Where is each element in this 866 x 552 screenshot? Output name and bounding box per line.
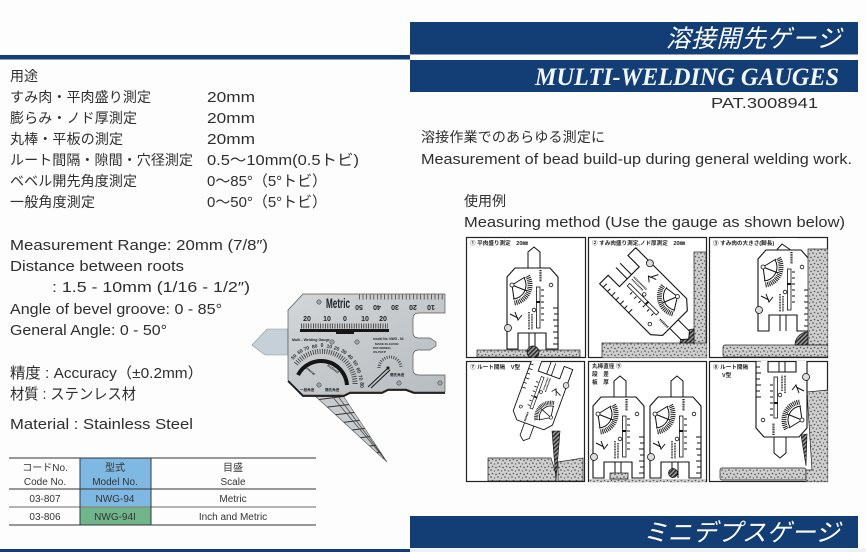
spec table: Model No. [92, 477, 138, 488]
gauge model lettering: 開先角度 [325, 387, 340, 392]
diagram 3: fillet leg size [710, 229, 828, 358]
text block: specifications in English: Angle of bevel groove: 0 - 85° [10, 301, 222, 318]
gauge model lettering: 開先角度 [390, 372, 405, 377]
diagram 4: root gap V: ⑦ ルート間隔 V型 [470, 363, 520, 371]
gauge model lettering: 20 [379, 316, 387, 323]
patent number: PAT.3008941 [711, 95, 818, 112]
gauge model lettering: US.PAT.P [373, 350, 386, 354]
gauge angle arc: 0 [321, 343, 324, 349]
spec table: 03-807 [29, 494, 61, 505]
diagram 2: fillet and throat [588, 238, 710, 358]
text block: accuracy and material: 材質 : ステンレス材 [10, 385, 136, 403]
spec table: コードNo. [22, 463, 68, 474]
gauge angle arc [290, 343, 364, 388]
header bar: English title [410, 60, 858, 92]
text block: specifications in Japanese [10, 68, 359, 211]
gauge body [288, 294, 445, 395]
text block: specifications in Japanese: 20mm [207, 131, 255, 148]
text block: specifications in Japanese: 丸棒・平板の測定 [10, 131, 123, 147]
diagram 5: round bar and plate: 段 差 [592, 370, 609, 378]
gauge model lettering [292, 295, 435, 392]
header bar: English title: MULTI-WELDING GAUGES [534, 64, 839, 91]
text block: specifications in English: General Angle: 0 - 50° [10, 322, 167, 339]
diagram 2: fillet and throat: ② すみ肉盛り測定,ノド厚測定 20㎜ [592, 239, 686, 247]
diagram 5: round bar and plate [588, 362, 706, 482]
gauge model lettering: 20 [409, 303, 417, 310]
gauge model lettering: 10 [323, 316, 331, 323]
text block: specifications in English: : 1.5 - 10mm (1/16 - 1/2″) [52, 279, 250, 296]
gauge top ruler [359, 294, 445, 300]
spec table: Inch and Metric [199, 512, 267, 523]
text block: specifications in English: Distance between roots [10, 258, 184, 275]
gauge small protractor [368, 357, 401, 388]
bottom right pale strip [410, 548, 866, 552]
header bar: Japanese title [410, 22, 858, 54]
gauge model lettering: Inclined [326, 364, 340, 374]
diagram 5: round bar and plate: 板 厚 [592, 378, 609, 386]
gauge sliding scale [300, 326, 389, 334]
text block: specifications in Japanese: 0～50°（5°トビ） [207, 194, 327, 211]
diagram 1: flat bead: ① 平肉盛り測定 20㎜ [470, 239, 529, 247]
gauge angle arc: 60 [296, 348, 305, 356]
text block: accuracy and material [10, 365, 203, 433]
top left rule [0, 55, 410, 60]
gauge angle arc: 50 [290, 353, 299, 361]
text block: accuracy and material: 精度 : Accuracy（±0.2mm） [10, 365, 203, 382]
text block: specifications in English [10, 237, 268, 339]
spec table: NWG-94I [94, 512, 136, 523]
gauge angle arc: 80 [312, 344, 318, 350]
diagram 4: root gap V [466, 355, 584, 482]
spec table [9, 458, 316, 525]
gauge rivets [317, 300, 442, 387]
gauge angle arc: 40 [346, 353, 354, 362]
gauge model lettering: model No. NWG - 94 [373, 337, 404, 341]
gauge wedge scale [313, 394, 387, 462]
bottom left rule [0, 549, 410, 552]
product photo: multi-welding gauge [252, 294, 445, 462]
text block: specifications in Japanese: 20mm [207, 89, 255, 106]
spec table: Code No. [24, 477, 66, 488]
text block: specifications in Japanese: すみ肉・平肉盛り測定 [10, 89, 151, 105]
gauge angle arc: 50 [351, 359, 359, 368]
table colored column [80, 458, 151, 507]
diagram 6: root gap V on wall: ⑧ ルート間隔 [713, 363, 749, 371]
gauge model lettering: Metric [326, 295, 350, 311]
gauge model lettering: 40 [373, 303, 381, 310]
text block: accuracy and material: Material : Stainless Steel [10, 416, 193, 433]
gauge angle arc: 20 [333, 345, 340, 353]
header bar: Japanese title: 溶接開先ゲージ [666, 26, 844, 53]
text block: specifications in Japanese: ルート間隔・隙間・穴径測定 [10, 152, 193, 168]
diagram 1: flat bead [466, 238, 586, 358]
usage heading: 使用例 [464, 193, 506, 209]
gauge angle arc: 70 [357, 375, 363, 381]
diagram 5: round bar and plate: 丸棒直径 ⑨ [592, 362, 622, 370]
text block: specifications in Japanese: 一般角度測定 [10, 194, 95, 210]
gauge model lettering: MADE IN JAPAN [375, 342, 398, 346]
gauge model lettering: 10 [361, 316, 369, 323]
gauge pointer [252, 329, 288, 355]
diagram 3: fillet leg size: ③ すみ肉の大きさ(脚長) [713, 239, 774, 247]
gauge angle arc: 30 [340, 348, 348, 356]
spec table: Metric [219, 494, 247, 505]
text block: specifications in Japanese: 膨らみ・ノド厚測定 [10, 110, 137, 126]
text block: specifications in English: Measurement Range: 20mm (7/8″) [10, 237, 268, 254]
text block: specifications in Japanese: 0.5～10mm(0.5トビ) [207, 152, 359, 169]
gauge model lettering: 20 [303, 316, 311, 323]
gauge model lettering: 50 [355, 303, 363, 310]
spec table: 型式 [105, 461, 125, 474]
gauge angle arc: 70 [303, 345, 311, 353]
spec table: 03-806 [29, 512, 61, 523]
header bar: mini depth gauge: ミニデプスゲージ [643, 520, 844, 547]
gauge model lettering: 10 [427, 303, 435, 310]
gauge angle arc: 80 [358, 382, 364, 388]
spec table: NWG-94 [96, 494, 135, 505]
text block: specifications in Japanese: 20mm [207, 110, 255, 127]
usage heading: Measuring method (Use the gauge as shown below) [464, 214, 845, 231]
gauge model lettering: PAT.3008941 [373, 346, 391, 350]
gauge model lettering: 一般角度 [300, 387, 315, 392]
diagram 6: root gap V on wall: V型 [722, 371, 732, 379]
diagram 6: root gap V on wall [710, 356, 828, 482]
spec table: 目盛 [223, 461, 243, 474]
gauge model lettering: 30 [391, 303, 399, 310]
usage heading [464, 193, 845, 231]
text block: specifications in Japanese: ベベル開先角度測定 [10, 173, 137, 189]
gauge model lettering: General [303, 365, 316, 376]
text block: specifications in Japanese: 0～85°（5°トビ） [207, 173, 327, 190]
spec table: Scale [220, 477, 246, 488]
gauge angle arc: 60 [354, 367, 362, 375]
intro text: Measurement of bead build-up during general welding work. [421, 151, 852, 168]
intro text: 溶接作業でのあらゆる測定に [421, 129, 605, 145]
header bar: mini depth gauge [410, 516, 858, 548]
gauge model lettering: 0 [343, 316, 347, 323]
gauge model lettering: Multi - Welding Gauge [292, 338, 330, 342]
gauge bottom shadow [288, 381, 445, 396]
intro text [421, 129, 852, 168]
gauge angle arc: 10 [326, 344, 333, 351]
text block: specifications in Japanese: 用途 [10, 68, 38, 84]
